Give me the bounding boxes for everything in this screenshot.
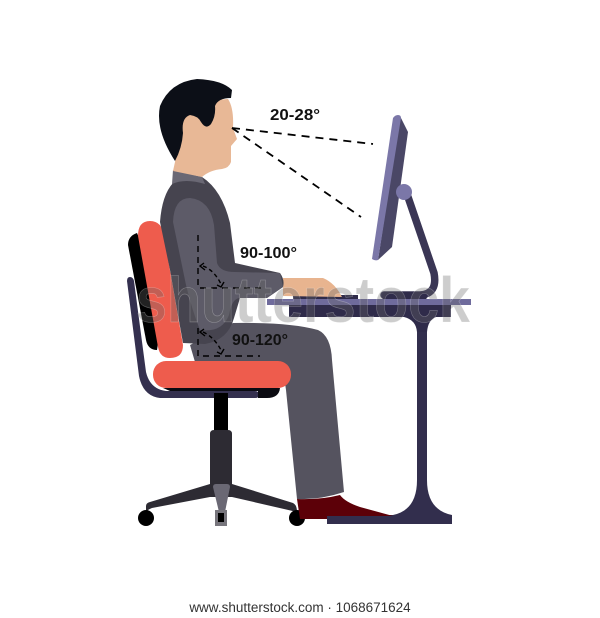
desk underside (289, 305, 451, 332)
chair wheels (138, 510, 305, 526)
chair front leg (213, 484, 230, 512)
hair (159, 79, 232, 161)
trouser leg (190, 323, 344, 499)
monitor arm (384, 197, 435, 295)
footer caption: www.shutterstock.com · 1068671624 (188, 600, 411, 615)
label: hip angle: 90-120° (232, 332, 288, 349)
watermark: shutterstock (136, 264, 470, 336)
chair post (214, 393, 228, 431)
monitor base (382, 292, 427, 300)
desk base and column (327, 317, 452, 524)
desk top (267, 299, 471, 305)
monitor screen (372, 115, 401, 260)
label: elbow angle: 90-100° (240, 245, 297, 262)
monitor joint (396, 184, 412, 200)
angle guides: arm and hip (198, 235, 262, 356)
monitor (372, 115, 412, 260)
keyboard (293, 295, 358, 300)
man (159, 79, 393, 519)
chair cylinder (210, 430, 232, 486)
shoe (297, 495, 393, 519)
jacket (160, 172, 284, 344)
neck and face (173, 99, 237, 177)
hand (283, 278, 342, 297)
chair back cushion shadow (128, 233, 165, 350)
chair under seat (163, 388, 280, 398)
chair base legs (146, 484, 297, 512)
desk (267, 197, 471, 524)
collar (172, 170, 205, 184)
office chair (127, 221, 305, 526)
chair backrest (138, 221, 183, 358)
chair frame (127, 277, 259, 398)
chair seat cushion (153, 361, 291, 388)
jacket sleeve (173, 198, 283, 330)
sight lines (232, 128, 373, 217)
label: viewing angle: 20-28° (270, 107, 320, 124)
monitor back (378, 116, 408, 260)
